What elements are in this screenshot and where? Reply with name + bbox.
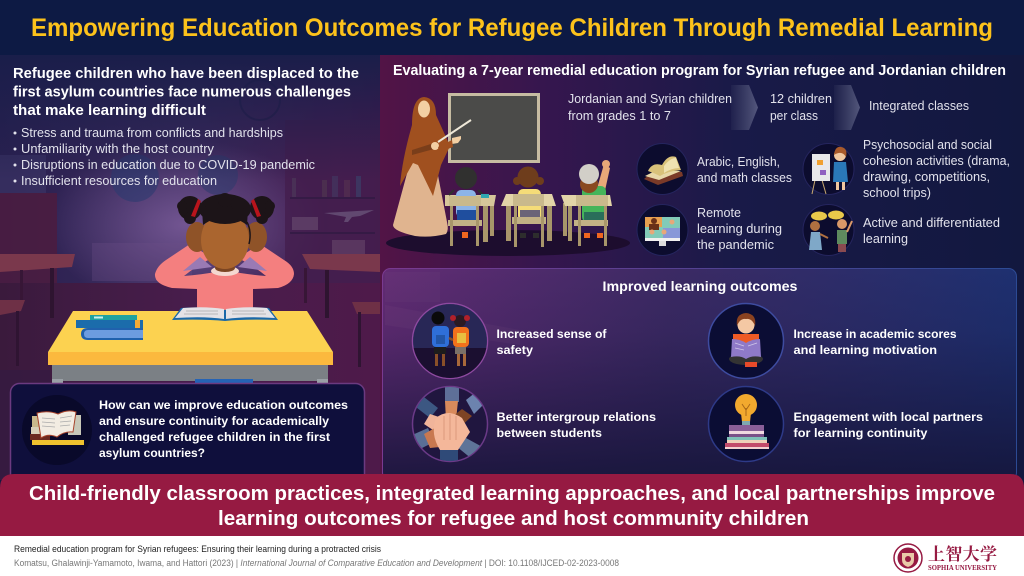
text: intergroup: Better intergroup relations [496,410,656,424]
challenges heading [13,65,359,119]
citation: Remedial education program for Syrian refugees: Ensuring their learning during a protracted crisis [14,544,381,555]
text: academic scores: Increase in academic scores [794,327,957,341]
pupil 3 [561,160,612,246]
challenges list: Stress and trauma from conflicts and hardships [21,125,283,140]
text: local partners: for learning continuity [794,426,928,440]
text: safety [496,327,607,357]
desk [48,311,333,383]
blackboard [448,93,540,163]
question text [99,398,348,460]
text: active learning: Active and differentiated [863,215,1000,230]
text: psychosocial activities [863,137,1010,200]
Sophia University logo: 上智大学 [928,540,997,565]
header bar [0,0,1024,55]
classroom background scene [0,55,380,480]
text: academic scores [794,327,957,357]
pupil 2 [501,166,556,247]
challenges list: Disruptions in education due to COVID-19 pandemic [21,157,316,172]
text: psychosocial activities: drawing, competitions, [863,169,990,184]
callout: research question [10,384,364,484]
title: Empowering Education Outcomes for Refugee Children Through Remedial Learning [31,14,993,42]
pupil 1 [445,167,496,246]
challenges heading: that make learning difficult [13,102,206,119]
illustration: teacher and pupils [386,93,630,256]
step: class size: 12 children [770,91,832,106]
text: remote learning [697,205,782,252]
faint classroom desk in panel [385,272,520,345]
text: intergroup [496,410,656,440]
icon: easel [803,144,854,194]
heading: evaluating program: Evaluating a 7-year remedial education program for Syrian refugee and Jordanian children [393,63,1006,79]
text: psychosocial activities: Psychosocial and social [863,137,992,152]
text: academic scores: and learning motivation [794,343,937,357]
text: remote learning: learning during [697,221,782,236]
text: local partners [794,410,983,440]
text: classes: and math classes [697,170,792,185]
citation [14,544,619,568]
step: grades: from grades 1 to 7 [568,108,671,123]
text: active learning: learning [863,231,908,246]
citation: Komatsu, Ghalawinji-Yamamoto, Iwama, and Hattori (2023) | International Journal of Comparative Education and Development | DOI: 10.1108/IJCED-02-2023-0008 [14,558,619,568]
footer [0,536,1024,576]
icon: remote learning [637,204,688,256]
text: local partners: Engagement with local partners [794,410,983,424]
girl [155,193,294,311]
icon: child reading [708,304,784,378]
challenges list: Unfamiliarity with the host country [21,141,215,156]
text: remote learning: Remote [697,205,741,220]
text: safety: Increased sense of [496,327,607,341]
icon: stack of books [22,395,92,465]
step: grades [568,91,732,123]
illustration: stressed girl at desk [48,193,333,383]
text: classes [697,154,792,185]
challenges list [14,125,316,188]
Sophia University logo [894,540,997,572]
conclusion banner: learning outcomes for refugee and host community children [218,508,809,530]
open book [172,307,278,321]
program flow [568,85,969,130]
challenges heading: Refugee children who have been displaced to the [13,65,359,82]
arrow [834,85,860,130]
question text: asylum countries? [99,446,205,460]
panel: challenges [13,65,359,188]
text: psychosocial activities: cohesion activities (drama, [863,153,1010,168]
question text: How can we improve education outcomes [99,398,348,412]
conclusion banner: Child-friendly classroom practices, integrated learning approaches, and local partnerships improve [29,483,995,505]
books on desk [76,315,143,340]
question text: challenged refugee children in the first [99,430,330,444]
step: grades: Jordanian and Syrian children [568,91,732,106]
program activities [637,137,1010,256]
text: active learning [863,215,1000,246]
icon: stacked hands [410,386,488,464]
question text: and ensure continuity for academically [99,414,329,428]
teacher [393,97,471,237]
conclusion banner [0,474,1024,536]
Sophia University logo: SOPHIA UNIVERSITY [928,564,997,572]
step: class size: per class [770,108,818,123]
outcomes heading: Improved learning outcomes [602,279,798,294]
challenges list: Insufficient resources for education [21,173,217,188]
panel: improved learning outcomes [382,268,1016,480]
text: classes: Arabic, English, [697,154,780,169]
text: safety: safety [496,343,533,357]
step: class size [770,91,832,123]
arrow [731,85,758,130]
icon: two children holding hands [412,303,488,380]
challenges heading: first asylum countries face numerous challenges [13,84,351,100]
icon: two children talking [803,204,854,256]
text: psychosocial activities: school trips) [863,185,931,200]
text: remote learning: the pandemic [697,237,775,252]
icon: books [637,144,688,194]
step: integrated classes: Integrated classes [869,98,969,113]
text: intergroup: between students [496,426,602,440]
icon: light bulb on books [708,386,784,462]
